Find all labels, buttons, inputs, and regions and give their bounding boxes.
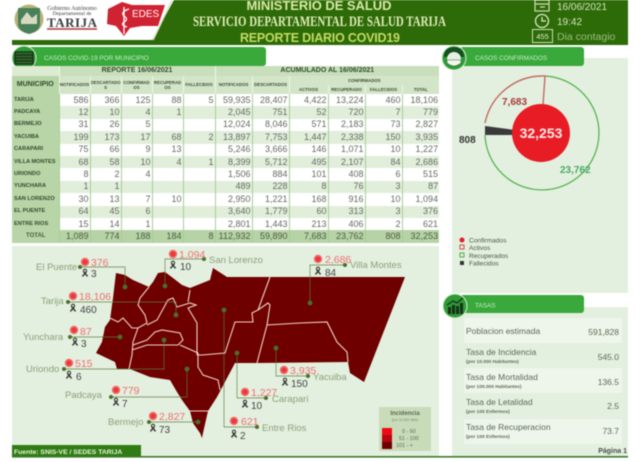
table: COVID-19 cases by municipality: 2,045 bbox=[228, 107, 251, 117]
table: COVID-19 cases by municipality: 4 bbox=[145, 169, 150, 179]
table: COVID-19 cases by municipality: DESCARTADOS bbox=[254, 82, 287, 87]
table: COVID-19 cases by municipality: 7 bbox=[145, 194, 150, 204]
contagion day label: Dia contagio bbox=[557, 31, 616, 43]
table: COVID-19 cases by municipality: VILLA MONTES bbox=[14, 159, 55, 165]
table: COVID-19 cases by municipality: 1 bbox=[145, 219, 150, 229]
map label: Tarija: 18,106 bbox=[79, 291, 111, 303]
table: COVID-19 cases by municipality: 884 bbox=[272, 169, 288, 179]
table: COVID-19 cases by municipality: 5,246 bbox=[228, 144, 251, 154]
table: COVID-19 cases by municipality: 2,827 bbox=[416, 119, 438, 129]
logo: Gobierno text: Gobierno Autónomo bbox=[47, 6, 97, 12]
donut: deaths value: 808 bbox=[459, 135, 476, 146]
table: COVID-19 cases by municipality: 1,447 bbox=[304, 132, 327, 142]
rate: mortality bbox=[466, 372, 619, 390]
logo: Gobierno de Tarija shield bbox=[14, 4, 44, 34]
table: COVID-19 cases by municipality: 2,686 bbox=[416, 157, 438, 167]
table: COVID-19 cases by municipality: 188 bbox=[135, 231, 150, 241]
table: COVID-19 cases by municipality: 32,253 bbox=[411, 231, 438, 241]
map label: Bermejo: Bermejo bbox=[108, 417, 143, 428]
map label: Yunchara: 87 bbox=[80, 326, 92, 338]
table: COVID-19 cases by municipality: 10 bbox=[391, 144, 401, 154]
table: COVID-19 cases by municipality: 112,932 bbox=[219, 231, 251, 241]
icon: rising chart bbox=[447, 298, 463, 314]
map label: Carapari bbox=[241, 387, 308, 412]
table: COVID-19 cases by municipality: 9 bbox=[145, 144, 150, 154]
donut: recovered value: 23,762 bbox=[560, 165, 591, 176]
table: COVID-19 cases by municipality: 366 bbox=[104, 95, 120, 105]
map label: Villa Montes: 2,686 bbox=[325, 254, 351, 266]
map label: San Lorenzo: 1,094 bbox=[179, 249, 205, 261]
map label: Villa Montes: 84 bbox=[325, 268, 337, 279]
table: COVID-19 cases by municipality: 1,443 bbox=[265, 219, 288, 229]
table: COVID-19 cases by municipality: 2,107 bbox=[341, 157, 364, 167]
table: COVID-19 cases by municipality: 101 bbox=[312, 169, 327, 179]
table: COVID-19 cases by municipality: ACUMULADO AL 16/06/2021 bbox=[280, 67, 374, 74]
donut legend: Fallecidos bbox=[469, 260, 499, 268]
icon: calendar bbox=[535, 0, 549, 11]
table: COVID-19 cases by municipality: 18,106 bbox=[411, 95, 438, 105]
page number: Página 1 bbox=[598, 448, 627, 455]
table: COVID-19 cases by municipality: 52 bbox=[317, 107, 327, 117]
rate: estimated population: 591,828 bbox=[588, 327, 619, 337]
map label: Entre Rios: Entre Rios bbox=[262, 423, 307, 434]
table: COVID-19 cases by municipality: OS bbox=[164, 85, 171, 90]
map label: Yunchara bbox=[23, 326, 92, 350]
table: COVID-19 cases by municipality: 76 bbox=[354, 181, 364, 191]
table: COVID-19 cases by municipality: 66 bbox=[109, 144, 120, 154]
icon: masked head bbox=[444, 47, 464, 66]
table: COVID-19 cases by municipality: 4,422 bbox=[304, 95, 327, 105]
table: COVID-19 cases by municipality: 2,950 bbox=[228, 194, 251, 204]
table: COVID-19 cases by municipality: 1,089 bbox=[66, 231, 88, 241]
map label: Padcaya: Padcaya bbox=[65, 390, 103, 401]
rate: lethality: 2.5 bbox=[607, 401, 619, 411]
table: COVID-19 cases by municipality: 774 bbox=[104, 231, 120, 241]
table: COVID-19 cases by municipality: 1,071 bbox=[341, 144, 364, 154]
table: COVID-19 cases by municipality: 213 bbox=[312, 219, 327, 229]
table: COVID-19 cases by municipality: 13 bbox=[109, 194, 120, 204]
rate: incidence: 545.0 bbox=[598, 352, 619, 362]
map label: Uriondo: 515 bbox=[75, 358, 93, 370]
map label: Padcaya: 7 bbox=[122, 399, 128, 410]
table: COVID-19 cases by municipality: 1,227 bbox=[416, 144, 438, 154]
map label: Entre Rios: 2 bbox=[240, 431, 246, 442]
source bar bbox=[12, 445, 141, 457]
table: COVID-19 cases by municipality: 59,890 bbox=[260, 231, 288, 241]
map label: Bermejo bbox=[108, 411, 185, 436]
table: COVID-19 cases by municipality: TOTAL bbox=[414, 87, 428, 92]
table: COVID-19 cases by municipality: 5 bbox=[209, 95, 214, 105]
rate: estimated population: Poblacion estimada bbox=[466, 326, 540, 336]
table: COVID-19 cases by municipality: EL PUENTE bbox=[14, 208, 45, 214]
rate: incidence: Tasa de Incidencia bbox=[466, 347, 537, 357]
rates header bar: TASAS bbox=[475, 303, 495, 310]
table: COVID-19 cases by municipality: NOTIFICADOS bbox=[60, 82, 89, 87]
map label: San Lorenzo bbox=[169, 249, 263, 273]
map: Tarija department bbox=[96, 268, 405, 438]
table: COVID-19 cases by municipality: 125 bbox=[135, 95, 150, 105]
rate: lethality: (por 100 Enfermos) bbox=[466, 409, 510, 415]
donut chart bbox=[459, 76, 599, 190]
icon: clock bbox=[536, 14, 548, 28]
rates header bar bbox=[443, 294, 584, 318]
rate: mortality: (por 100.000 Habitantes) bbox=[466, 384, 522, 390]
table: COVID-19 cases by municipality: 313 bbox=[348, 206, 364, 216]
table: COVID-19 cases by municipality: FALLECIDOS bbox=[370, 87, 397, 92]
table: COVID-19 cases by municipality: 1 bbox=[209, 157, 214, 167]
table: COVID-19 cases by municipality: 168 bbox=[312, 194, 327, 204]
table: COVID-19 cases by municipality: URIONDO bbox=[14, 171, 40, 177]
donut: total circle bbox=[512, 104, 570, 162]
map label: Padcaya bbox=[65, 385, 140, 410]
table: COVID-19 cases by municipality: 23,762 bbox=[336, 231, 364, 241]
panel: rates bbox=[452, 307, 628, 456]
map label: El Puente: 376 bbox=[91, 257, 109, 269]
footer line bbox=[12, 456, 628, 458]
icon: table list bbox=[15, 52, 33, 64]
map legend: incidence bbox=[379, 407, 431, 451]
table: COVID-19 cases by municipality bbox=[12, 65, 440, 244]
map label: Yacuiba: Yacuiba bbox=[313, 372, 347, 383]
table: COVID-19 cases by municipality: YUNCHARA bbox=[14, 183, 46, 189]
map label: Carapari: Carapari bbox=[272, 394, 308, 405]
table: COVID-19 cases by municipality: 13,224 bbox=[336, 95, 364, 105]
map label: San Lorenzo: 10 bbox=[180, 262, 192, 273]
panel: municipality table header bar: CASOS COVID-19 POR MUNICIPIO bbox=[44, 55, 149, 62]
table: COVID-19 cases by municipality: 751 bbox=[272, 107, 288, 117]
logo: SEDES bbox=[107, 2, 165, 36]
table: COVID-19 cases by municipality: 495 bbox=[312, 157, 327, 167]
table: COVID-19 cases by municipality: 2 bbox=[209, 132, 214, 142]
donut: deaths wedge bbox=[485, 126, 515, 135]
table: COVID-19 cases by municipality: 3 bbox=[396, 206, 401, 216]
table: COVID-19 cases by municipality: OS bbox=[133, 85, 140, 90]
table: COVID-19 cases by municipality: 1,094 bbox=[416, 194, 438, 204]
map legend: incidence: (por 10.000 Hbts) bbox=[392, 418, 418, 422]
table: COVID-19 cases by municipality: 1,221 bbox=[265, 194, 288, 204]
rate: incidence bbox=[466, 347, 619, 365]
table: COVID-19 cases by municipality: FALLECIDOS bbox=[185, 82, 213, 87]
table: COVID-19 cases by municipality: 7 bbox=[396, 107, 401, 117]
table: COVID-19 cases by municipality: 14 bbox=[109, 219, 120, 229]
table: COVID-19 cases by municipality: 13,897 bbox=[223, 132, 251, 142]
map label: Carapari: 1,227 bbox=[251, 387, 277, 399]
table: COVID-19 cases by municipality: 87 bbox=[428, 181, 438, 191]
table: COVID-19 cases by municipality: PADCAYA bbox=[14, 109, 40, 115]
logo: Gobierno text: TARIJA bbox=[47, 15, 98, 30]
table: COVID-19 cases by municipality: NOTIFICADOS bbox=[219, 82, 248, 87]
map label: Uriondo bbox=[26, 358, 93, 383]
table: COVID-19 cases by municipality: S bbox=[104, 85, 107, 90]
table: COVID-19 cases by municipality: 3 bbox=[396, 181, 401, 191]
donut legend: Recuperados bbox=[469, 253, 509, 260]
table: COVID-19 cases by municipality: 376 bbox=[423, 206, 438, 216]
table: COVID-19 cases by municipality: ACTIVOS bbox=[299, 87, 318, 92]
table: COVID-19 cases by municipality: 2,801 bbox=[228, 219, 251, 229]
map label: Tarija bbox=[41, 291, 111, 316]
map label: Uriondo: 6 bbox=[76, 372, 82, 383]
rate: recovery: Tasa de Recuperacion bbox=[466, 422, 551, 432]
table: COVID-19 cases by municipality: 8 bbox=[322, 181, 327, 191]
table: COVID-19 cases by municipality: 515 bbox=[423, 169, 438, 179]
table: COVID-19 cases by municipality: 15 bbox=[78, 219, 88, 229]
rate: estimated population bbox=[466, 326, 619, 337]
donut legend: Confirmados bbox=[469, 238, 507, 244]
table: COVID-19 cases by municipality: 146 bbox=[312, 144, 327, 154]
rate: recovery bbox=[466, 422, 619, 440]
contagion day counter bbox=[532, 30, 552, 42]
table: COVID-19 cases by municipality: 571 bbox=[312, 119, 327, 129]
table: COVID-19 cases by municipality: 808 bbox=[386, 231, 401, 241]
donut: active arc bbox=[485, 76, 545, 123]
map label: Tarija: Tarija bbox=[41, 296, 64, 307]
table: COVID-19 cases by municipality: 84 bbox=[391, 157, 401, 167]
table: COVID-19 cases by municipality: 199 bbox=[73, 132, 88, 142]
header: report title: REPORTE DIARIO COVID19 bbox=[240, 31, 400, 45]
table: COVID-19 cases by municipality: 30 bbox=[78, 194, 88, 204]
table: COVID-19 cases by municipality: 8 bbox=[83, 169, 88, 179]
map label: Bermejo: 2,827 bbox=[159, 411, 185, 423]
map label: Padcaya: 779 bbox=[122, 385, 140, 397]
table: COVID-19 cases by municipality: TOTAL bbox=[26, 233, 45, 239]
table: COVID-19 cases by municipality: CONFIRMAD bbox=[123, 80, 150, 84]
header: department title: SERVICIO DEPARTAMENTAL DE SALUD TARIJA bbox=[193, 14, 446, 30]
map label: Bermejo: 73 bbox=[159, 425, 171, 436]
table: COVID-19 cases by municipality: TARIJA bbox=[14, 97, 34, 103]
table: COVID-19 cases by municipality: 1 bbox=[176, 107, 182, 117]
table: COVID-19 cases by municipality: 31 bbox=[78, 119, 88, 129]
map label: Yacuiba: 150 bbox=[291, 379, 308, 390]
rate: lethality bbox=[466, 397, 619, 415]
table: COVID-19 cases by municipality: 45 bbox=[109, 206, 120, 216]
table: COVID-19 cases by municipality: 1 bbox=[114, 181, 120, 191]
table: COVID-19 cases by municipality: 13 bbox=[171, 144, 182, 154]
table: COVID-19 cases by municipality: 5 bbox=[145, 119, 150, 129]
table: COVID-19 cases by municipality: 10 bbox=[109, 107, 120, 117]
contagion day counter: 455 bbox=[536, 32, 549, 41]
table: COVID-19 cases by municipality: 408 bbox=[348, 169, 364, 179]
table: COVID-19 cases by municipality: 58 bbox=[109, 157, 120, 167]
map label: Yunchara: 3 bbox=[81, 339, 87, 350]
logo: SEDES: EDES bbox=[132, 9, 160, 20]
rate: lethality: Tasa de Letalidad bbox=[466, 397, 533, 407]
table: COVID-19 cases by municipality: 150 bbox=[386, 132, 401, 142]
table: COVID-19 cases by municipality: 6 bbox=[145, 206, 150, 216]
map label: Entre Rios bbox=[230, 416, 307, 442]
table: COVID-19 cases by municipality: 73 bbox=[391, 119, 401, 129]
source bar: Fuente: SNIS-VE / SEDES TARIJA bbox=[14, 449, 122, 456]
map label: Yacuiba: 3,935 bbox=[290, 365, 316, 377]
table: COVID-19 cases by municipality: MUNICIPIO bbox=[17, 81, 54, 88]
table: COVID-19 cases by municipality: REPORTE 16/06/2021 bbox=[102, 67, 172, 74]
map label: Yunchara: Yunchara bbox=[23, 332, 64, 343]
table: COVID-19 cases by municipality: SAN LORENZO bbox=[14, 196, 55, 202]
table: COVID-19 cases by municipality: 60 bbox=[317, 206, 327, 216]
time: 19:42 bbox=[557, 17, 582, 28]
logo: Gobierno text bbox=[47, 6, 98, 30]
table: COVID-19 cases by municipality: 621 bbox=[423, 219, 438, 229]
map label: El Puente: 3 bbox=[91, 269, 97, 280]
table: COVID-19 cases by municipality: 8 bbox=[209, 231, 214, 241]
map legend: incidence: 51 - 100 bbox=[399, 436, 419, 442]
table: COVID-19 cases by municipality: 4 bbox=[145, 107, 150, 117]
map label: Villa Montes bbox=[314, 254, 402, 279]
table: COVID-19 cases by municipality: 586 bbox=[73, 95, 88, 105]
table: COVID-19 cases by municipality: 68 bbox=[78, 157, 88, 167]
map legend: incidence: 0 - 50 bbox=[402, 429, 416, 435]
panel: municipality table header bar bbox=[12, 46, 266, 70]
map label: Villa Montes: Villa Montes bbox=[350, 260, 402, 271]
table: COVID-19 cases by municipality: 406 bbox=[348, 219, 364, 229]
table: COVID-19 cases by municipality: 779 bbox=[423, 107, 438, 117]
date: 16/06/2021 bbox=[557, 2, 607, 13]
table: COVID-19 cases by municipality: 88 bbox=[171, 95, 182, 105]
table: COVID-19 cases by municipality: 7,753 bbox=[265, 132, 288, 142]
donut: recovered arc bbox=[485, 76, 599, 190]
header banner bbox=[12, 0, 628, 45]
rate: incidence: (por 10.000 Habitantes) bbox=[466, 359, 519, 365]
table: COVID-19 cases by municipality: 1,779 bbox=[265, 206, 288, 216]
table: COVID-19 cases by municipality: 3,640 bbox=[228, 206, 251, 216]
donut legend bbox=[460, 238, 509, 268]
table: COVID-19 cases by municipality: 2,183 bbox=[341, 119, 364, 129]
logo: Gobierno text: Departamental de bbox=[53, 11, 92, 17]
table: COVID-19 cases by municipality: CARAPARI bbox=[14, 146, 43, 152]
table: COVID-19 cases by municipality: 720 bbox=[348, 107, 364, 117]
table: COVID-19 cases by municipality: 12 bbox=[78, 107, 88, 117]
map label: San Lorenzo: San Lorenzo bbox=[209, 255, 263, 266]
table: COVID-19 cases by municipality: RECUPERADO bbox=[331, 87, 362, 92]
panel: confirmed cases bbox=[452, 58, 628, 293]
table: COVID-19 cases by municipality: 3,935 bbox=[416, 132, 438, 142]
table: COVID-19 cases by municipality: BERMEJO bbox=[14, 121, 42, 127]
table: COVID-19 cases by municipality: 17 bbox=[140, 132, 150, 142]
map label: Carapari: 10 bbox=[251, 401, 263, 412]
confirmed cases header bar bbox=[442, 46, 584, 70]
table: COVID-19 cases by municipality: ENTRE RIOS bbox=[14, 221, 48, 227]
table: COVID-19 cases by municipality: 75 bbox=[78, 144, 88, 154]
table: COVID-19 cases by municipality: 916 bbox=[348, 194, 364, 204]
donut: active value: 7,683 bbox=[502, 97, 527, 108]
table: COVID-19 cases by municipality: 28,407 bbox=[260, 95, 288, 105]
table: COVID-19 cases by municipality: RECUPERAD bbox=[154, 80, 181, 84]
table: COVID-19 cases by municipality: 26 bbox=[109, 119, 120, 129]
rate: recovery: 73.7 bbox=[602, 426, 619, 436]
table: COVID-19 cases by municipality: 4 bbox=[176, 157, 182, 167]
table: COVID-19 cases by municipality: 2,338 bbox=[341, 132, 364, 142]
confirmed cases header bar: CASOS CONFIRMADOS bbox=[475, 55, 547, 62]
table: COVID-19 cases by municipality: 2 bbox=[396, 219, 401, 229]
table: COVID-19 cases by municipality: 6 bbox=[396, 169, 401, 179]
map label: Entre Rios: 621 bbox=[241, 416, 259, 428]
table: COVID-19 cases by municipality: 460 bbox=[386, 95, 401, 105]
table: COVID-19 cases by municipality: 489 bbox=[236, 181, 251, 191]
table: COVID-19 cases by municipality: 1,506 bbox=[228, 169, 251, 179]
table: COVID-19 cases by municipality: 10 bbox=[391, 194, 401, 204]
donut legend: Activos bbox=[469, 245, 491, 252]
rate: mortality: 136.5 bbox=[598, 377, 619, 387]
map label: Uriondo: Uriondo bbox=[26, 364, 59, 375]
table: COVID-19 cases by municipality: 2 bbox=[114, 169, 120, 179]
table: COVID-19 cases by municipality: 59,935 bbox=[223, 95, 251, 105]
table: COVID-19 cases by municipality: 3,666 bbox=[265, 144, 288, 154]
map: leader lines bbox=[64, 259, 345, 427]
table: COVID-19 cases by municipality: 184 bbox=[166, 231, 182, 241]
map label: El Puente: El Puente bbox=[36, 262, 77, 273]
table: COVID-19 cases by municipality: 64 bbox=[78, 206, 88, 216]
table: COVID-19 cases by municipality: DESCARTADO bbox=[90, 80, 120, 84]
map label: Yacuiba bbox=[280, 365, 347, 390]
map label: El Puente bbox=[36, 257, 109, 280]
table: COVID-19 cases by municipality: 68 bbox=[171, 132, 182, 142]
table: COVID-19 cases by municipality: 8,046 bbox=[265, 119, 288, 129]
table: COVID-19 cases by municipality: 10 bbox=[171, 194, 182, 204]
table: COVID-19 cases by municipality: 12,024 bbox=[223, 119, 251, 129]
table: COVID-19 cases by municipality: 8,399 bbox=[228, 157, 251, 167]
rate: recovery: (por 100 Enfermos) bbox=[466, 434, 510, 440]
table: COVID-19 cases by municipality: CONFIRMADOS bbox=[348, 78, 381, 83]
table: COVID-19 cases by municipality: 1 bbox=[83, 181, 88, 191]
map: leader dots bbox=[62, 257, 347, 429]
table: COVID-19 cases by municipality: 173 bbox=[104, 132, 120, 142]
table: COVID-19 cases by municipality: 10 bbox=[140, 157, 150, 167]
table: COVID-19 cases by municipality: YACUIBA bbox=[14, 134, 39, 140]
donut: total value: 32,253 bbox=[520, 125, 563, 141]
rate: mortality: Tasa de Mortalidad bbox=[466, 372, 538, 382]
table: COVID-19 cases by municipality: 5,712 bbox=[265, 157, 288, 167]
panel: map background bbox=[12, 246, 439, 456]
map legend: incidence: Incidencia bbox=[390, 411, 420, 417]
table: COVID-19 cases by municipality: 228 bbox=[272, 181, 288, 191]
map label: Tarija: 460 bbox=[80, 305, 97, 316]
table: COVID-19 cases by municipality: 7,683 bbox=[304, 231, 327, 241]
map legend: incidence: 101 - + bbox=[396, 443, 413, 449]
